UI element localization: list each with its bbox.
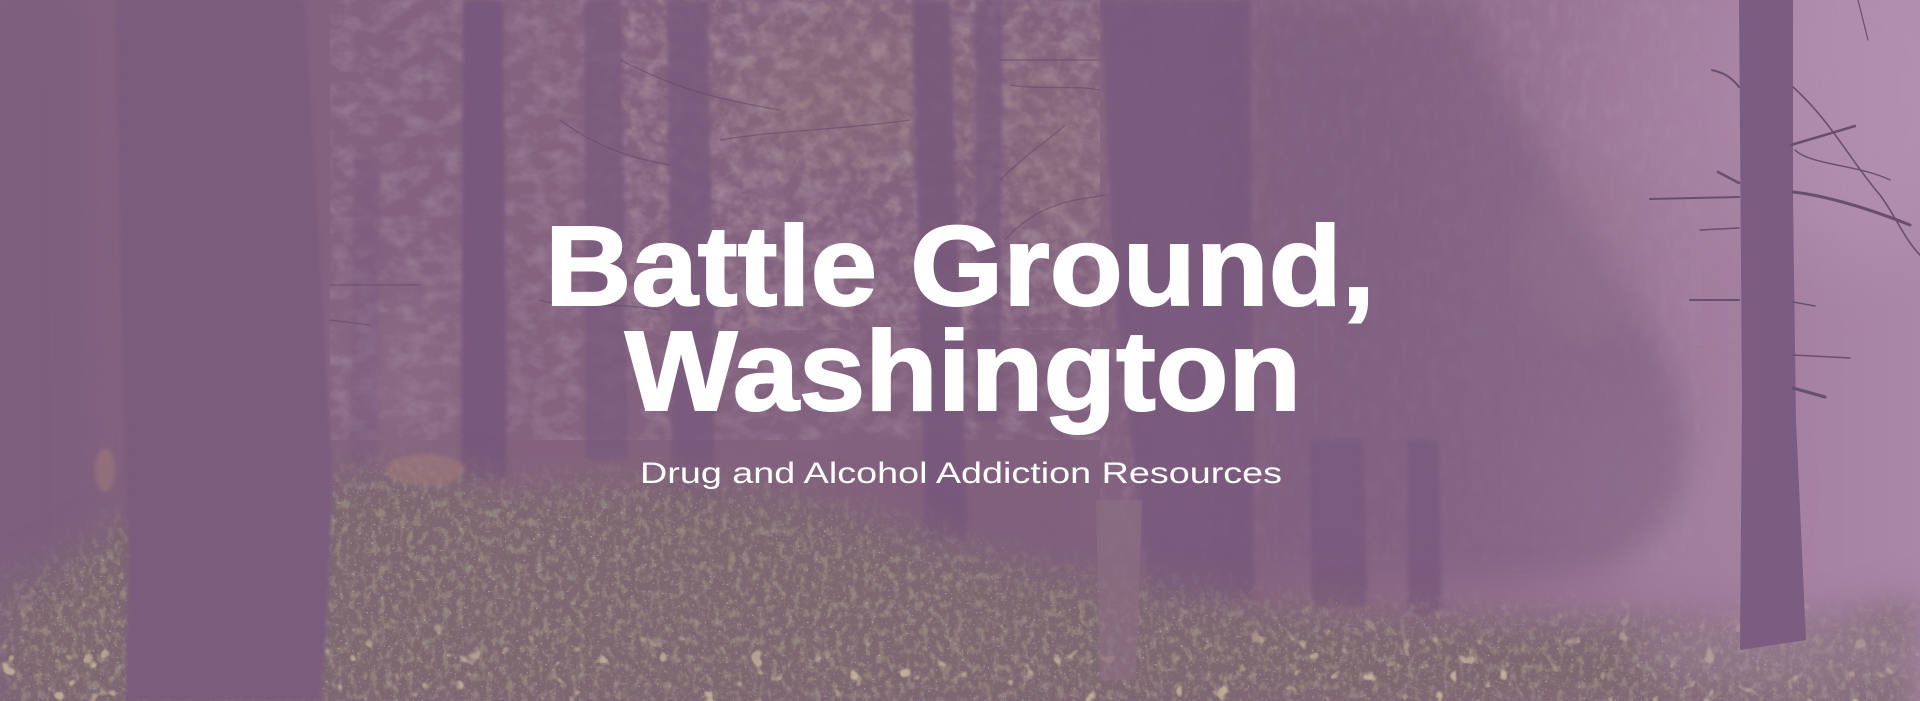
background tree trunks — [350, 0, 1442, 616]
left edge faint trunk — [0, 0, 92, 600]
foreground left tree trunk — [116, 0, 332, 701]
right tree with bare branches — [1650, 0, 1920, 650]
fine branches in the canopy — [330, 60, 1105, 325]
dark conifer foliage — [1250, 0, 1689, 577]
undergrowth — [0, 448, 1920, 701]
title second line: Washington — [625, 308, 1301, 434]
subtitle: Drug and Alcohol Addiction Resources — [640, 457, 1282, 490]
sunlit canopy between trunks — [330, 0, 1700, 560]
post in clearing — [1096, 500, 1142, 680]
title: Battle Ground, — [545, 203, 1375, 329]
